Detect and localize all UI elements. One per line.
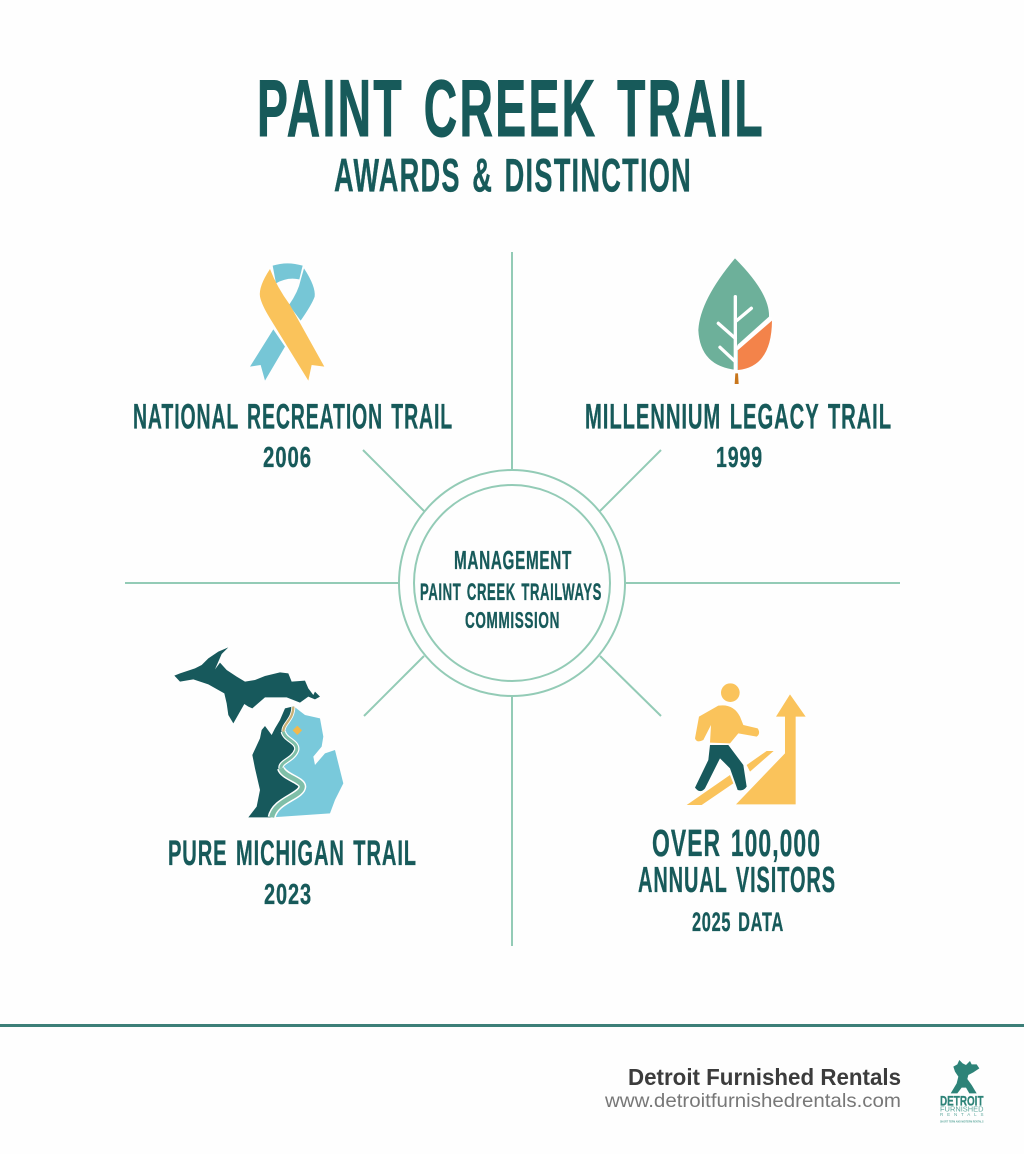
icon: walker climbing with arrow bbox=[687, 683, 806, 805]
label: visitors: OVER 100,000 bbox=[652, 823, 821, 865]
footer rule bbox=[0, 1024, 1024, 1027]
footer text: www.detroitfurnishedrentals.com bbox=[604, 1090, 901, 1112]
label: visitors: ANNUAL VISITORS bbox=[638, 859, 836, 900]
logo: FURNISHED bbox=[940, 1106, 984, 1114]
label: national recreation trail bbox=[133, 398, 453, 474]
center hub bbox=[399, 470, 625, 696]
subtitle: AWARDS & DISTINCTION bbox=[334, 148, 692, 202]
label: millennium legacy trail: 1999 bbox=[716, 442, 763, 474]
footer text bbox=[604, 1064, 901, 1112]
center hub: COMMISSION bbox=[465, 607, 560, 633]
logo: SHORT TERM AND MIDTERM RENTALS bbox=[940, 1120, 984, 1124]
logo: DETROIT bbox=[940, 1092, 984, 1108]
label: national recreation trail: 2006 bbox=[263, 442, 312, 474]
radial divider lines bbox=[125, 252, 900, 946]
icon: leaf bbox=[698, 258, 772, 384]
label: pure michigan trail bbox=[168, 834, 417, 911]
label: national recreation trail: NATIONAL RECREATION TRAIL bbox=[133, 398, 453, 436]
label: pure michigan trail: PURE MICHIGAN TRAIL bbox=[168, 834, 417, 873]
label: visitors: 2025 DATA bbox=[692, 907, 784, 937]
footer text: Detroit Furnished Rentals bbox=[628, 1064, 901, 1090]
label: pure michigan trail: 2023 bbox=[264, 879, 312, 911]
center hub: PAINT CREEK TRAILWAYS bbox=[420, 579, 602, 606]
label: millennium legacy trail bbox=[585, 398, 892, 474]
icon: michigan map with trail bbox=[174, 647, 343, 817]
label: visitors bbox=[638, 823, 836, 937]
logo bbox=[940, 1060, 984, 1124]
center hub: MANAGEMENT bbox=[454, 545, 572, 575]
logo: RENTALS bbox=[940, 1112, 984, 1117]
icon: ribbon bbox=[250, 263, 324, 381]
